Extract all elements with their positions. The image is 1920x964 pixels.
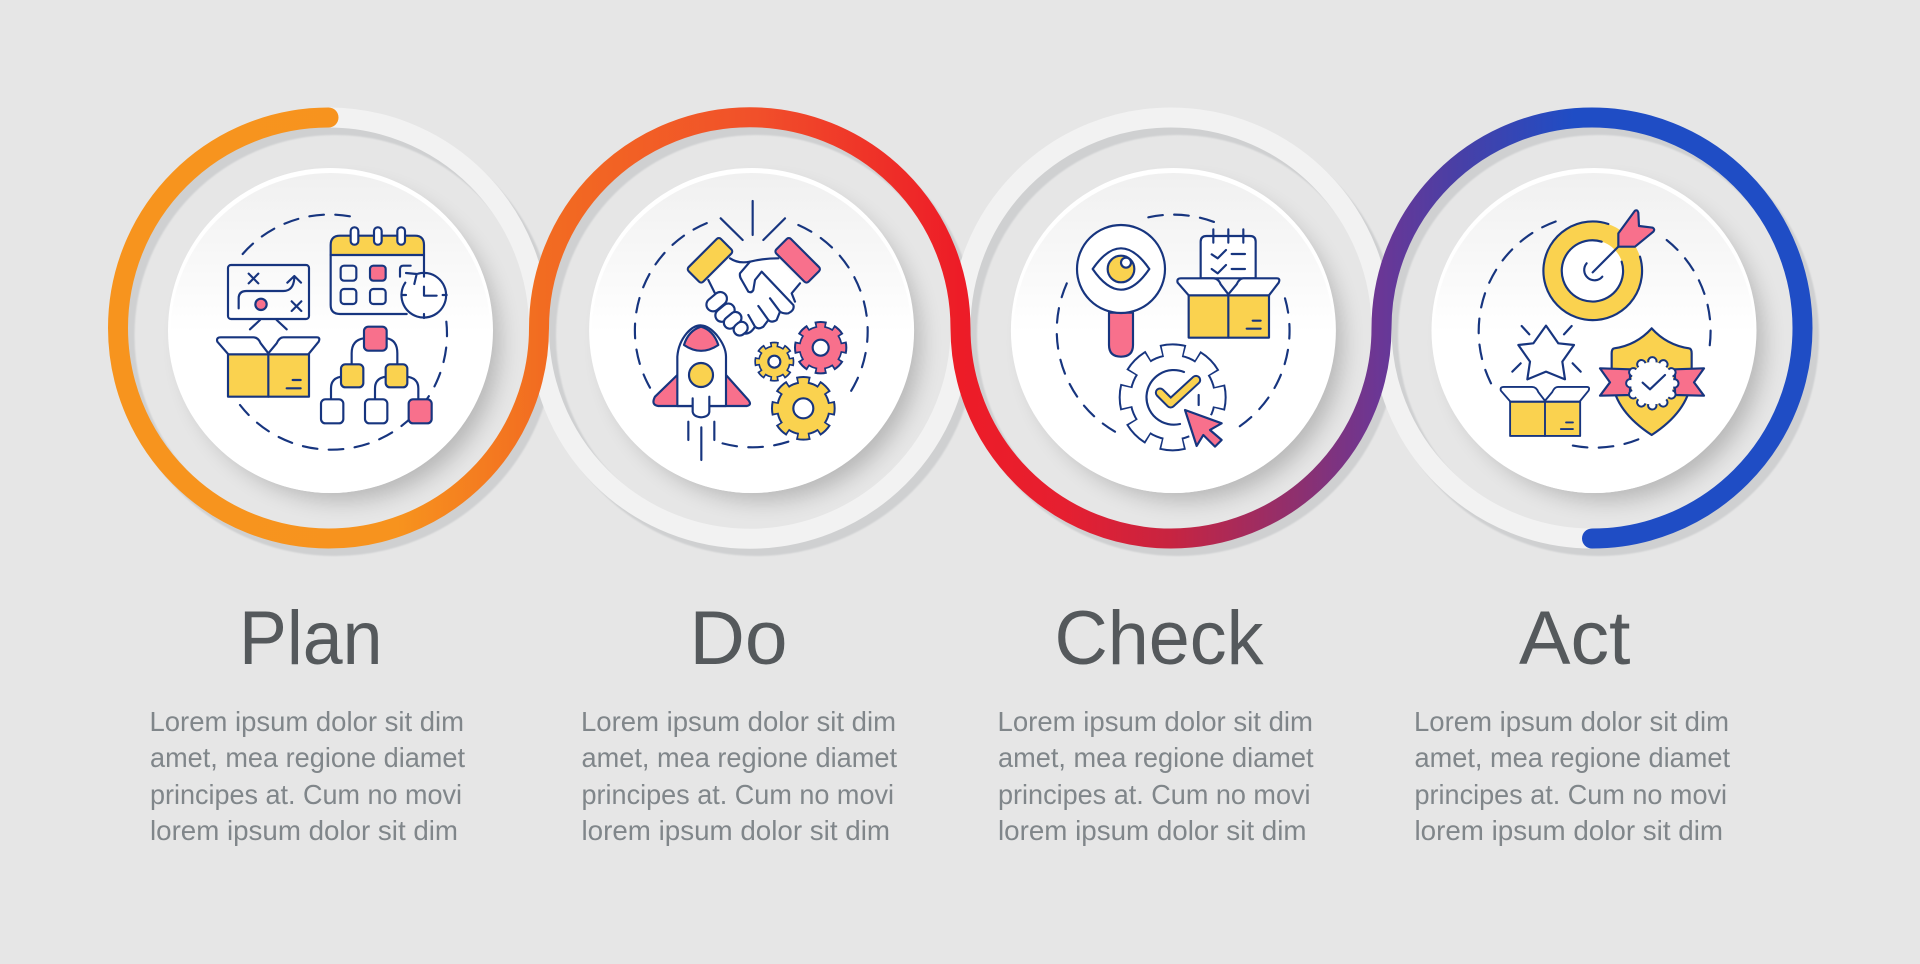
unfilled light ring segments — [328, 118, 1592, 539]
text block: check: amet, mea regione diamet — [998, 742, 1314, 773]
plan disk — [168, 168, 500, 501]
text block: plan: principes at. Cum no movi — [150, 779, 462, 810]
panel: check — [998, 168, 1343, 846]
heading: do: Do — [690, 596, 788, 681]
white gear — [1125, 349, 1221, 445]
large yellow gear — [774, 379, 832, 437]
small yellow gear — [757, 344, 792, 379]
heading: plan: Plan — [239, 596, 382, 681]
text block: act: principes at. Cum no movi — [1414, 779, 1727, 810]
text block: act: lorem ipsum dolor sit dim — [1414, 815, 1723, 846]
pink gear — [797, 324, 844, 371]
text block: act: amet, mea regione diamet — [1414, 742, 1730, 773]
text block: plan — [150, 706, 465, 846]
panel: plan — [150, 168, 500, 846]
heading: act: Act — [1519, 596, 1630, 681]
badge — [1630, 361, 1674, 405]
small box — [1501, 387, 1589, 436]
check disk — [1011, 168, 1343, 501]
icon: check — [1057, 215, 1290, 447]
panel: act — [1414, 168, 1764, 846]
act disk — [1432, 168, 1764, 501]
panel: do — [581, 168, 921, 846]
text block: check: Lorem ipsum dolor sit dim — [998, 706, 1313, 737]
ring shadows — [124, 125, 1809, 546]
text block: do — [581, 706, 897, 846]
icon: plan — [217, 215, 447, 450]
text block: do: Lorem ipsum dolor sit dim — [581, 706, 896, 737]
text block: check: lorem ipsum dolor sit dim — [998, 815, 1306, 846]
text block: check — [998, 706, 1314, 846]
text block: plan: Lorem ipsum dolor sit dim — [150, 706, 464, 737]
text block: plan: lorem ipsum dolor sit dim — [150, 815, 458, 846]
text block: check: principes at. Cum no movi — [998, 779, 1310, 810]
do disk — [589, 168, 921, 501]
text block: do: amet, mea regione diamet — [582, 742, 897, 773]
text block: plan: amet, mea regione diamet — [150, 742, 465, 773]
text block: act: Lorem ipsum dolor sit dim — [1414, 706, 1729, 737]
icon: do — [635, 201, 868, 460]
gradient flowing line connecting the four steps — [118, 117, 1803, 539]
text block: do: principes at. Cum no movi — [582, 779, 894, 810]
text block: do: lorem ipsum dolor sit dim — [582, 815, 890, 846]
icon: act — [1479, 210, 1711, 448]
text block: act — [1414, 706, 1730, 846]
heading: check: Check — [1054, 596, 1264, 681]
